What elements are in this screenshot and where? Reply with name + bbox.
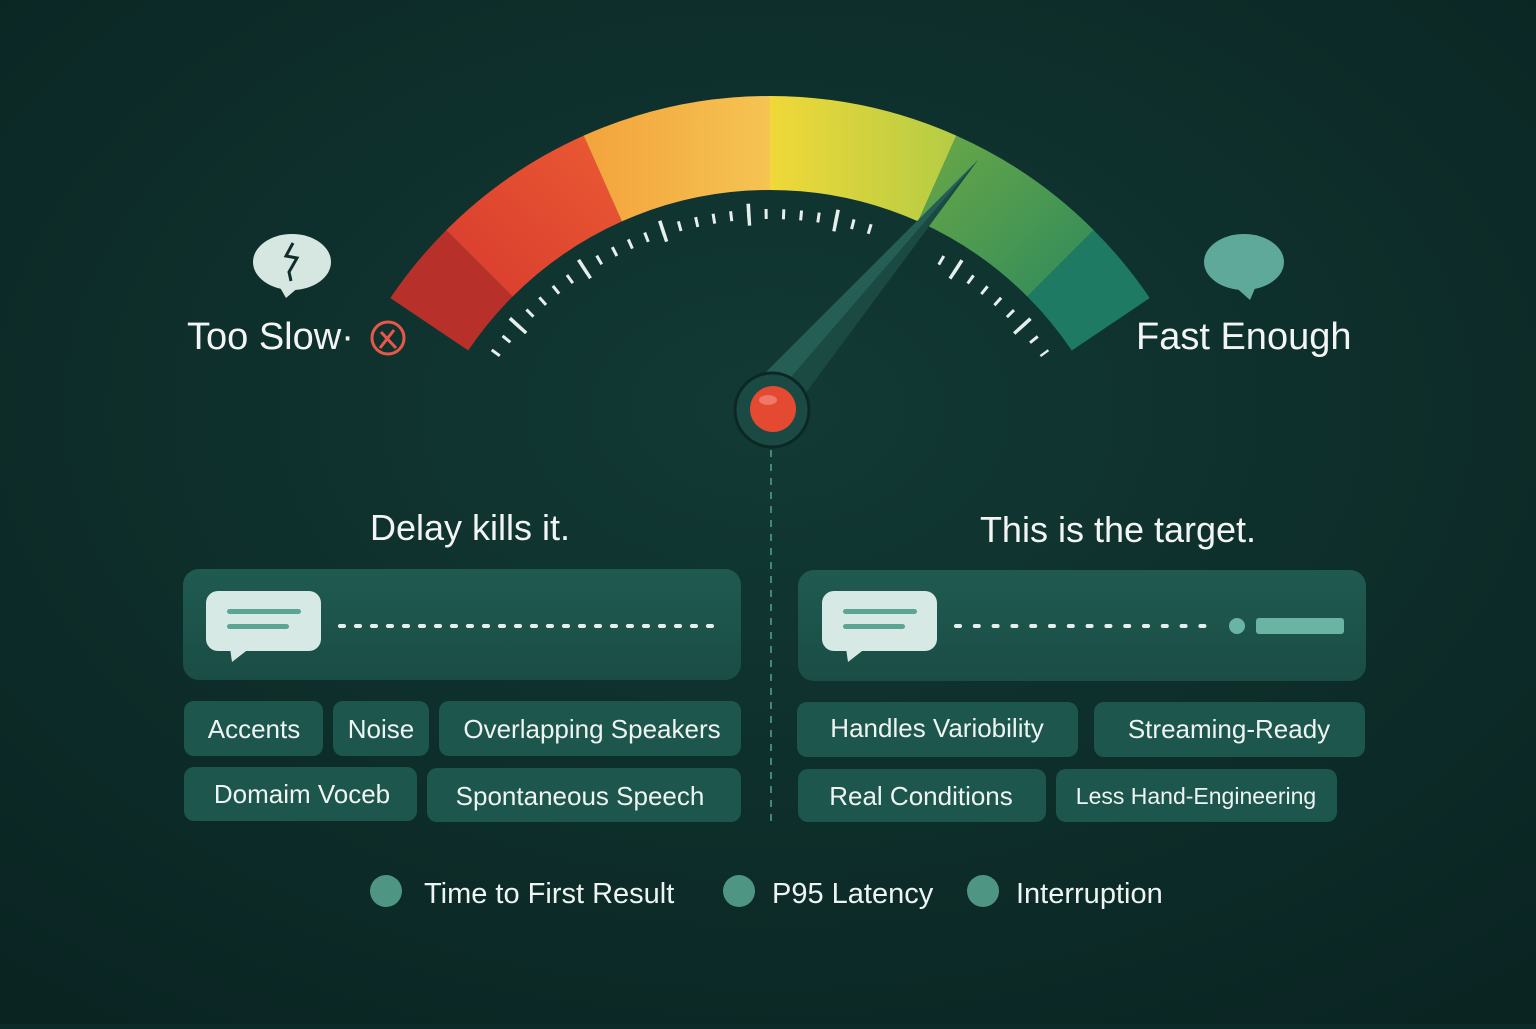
panel: fast timeline <box>798 570 1366 681</box>
icon: chat bubble <box>822 591 937 662</box>
gauge arc: dark red <box>390 230 513 350</box>
legend <box>370 875 1163 910</box>
label: Too Slow: Too Slow· <box>187 316 354 358</box>
tags: left challenges: Spontaneous Speech <box>456 781 704 811</box>
gauge arc: teal end <box>1027 230 1150 350</box>
gauge arc: green <box>918 136 1094 297</box>
tags: right benefits <box>797 702 1365 822</box>
tags: right benefits: Less Hand-Engineering <box>1076 783 1316 809</box>
gauge arc: red <box>446 136 622 297</box>
tags: left challenges: Domaim Voceb <box>214 779 390 809</box>
legend: Time to First Result <box>424 878 674 910</box>
icon: chat bubble <box>206 591 321 662</box>
gauge <box>390 96 1150 447</box>
needle <box>735 160 978 447</box>
legend: Interruption <box>1016 878 1163 910</box>
divider dashed line <box>770 450 772 822</box>
gauge arc: yellow <box>770 96 956 221</box>
tags: right benefits: Streaming-Ready <box>1128 714 1330 744</box>
legend: P95 Latency <box>772 878 934 910</box>
tags: left challenges: Overlapping Speakers <box>463 714 721 744</box>
label: Fast Enough: Fast Enough <box>1136 316 1351 358</box>
tick marks <box>495 214 1045 354</box>
tags: left challenges: Noise <box>348 714 414 744</box>
tags: right benefits: Real Conditions <box>829 781 1013 811</box>
icon: broken speech bubble <box>253 234 331 298</box>
gauge arc: orange <box>584 96 770 221</box>
tags: left challenges <box>184 701 741 822</box>
heading: This is the target.: This is the target. <box>980 509 1256 550</box>
tags: left challenges: Accents <box>208 714 300 744</box>
heading: Delay kills it.: Delay kills it. <box>370 507 570 548</box>
icon: red x circle <box>372 322 404 354</box>
panel: slow timeline <box>183 569 741 680</box>
tags: right benefits: Handles Variobility <box>830 713 1044 743</box>
icon: teal speech bubble <box>1204 234 1284 300</box>
